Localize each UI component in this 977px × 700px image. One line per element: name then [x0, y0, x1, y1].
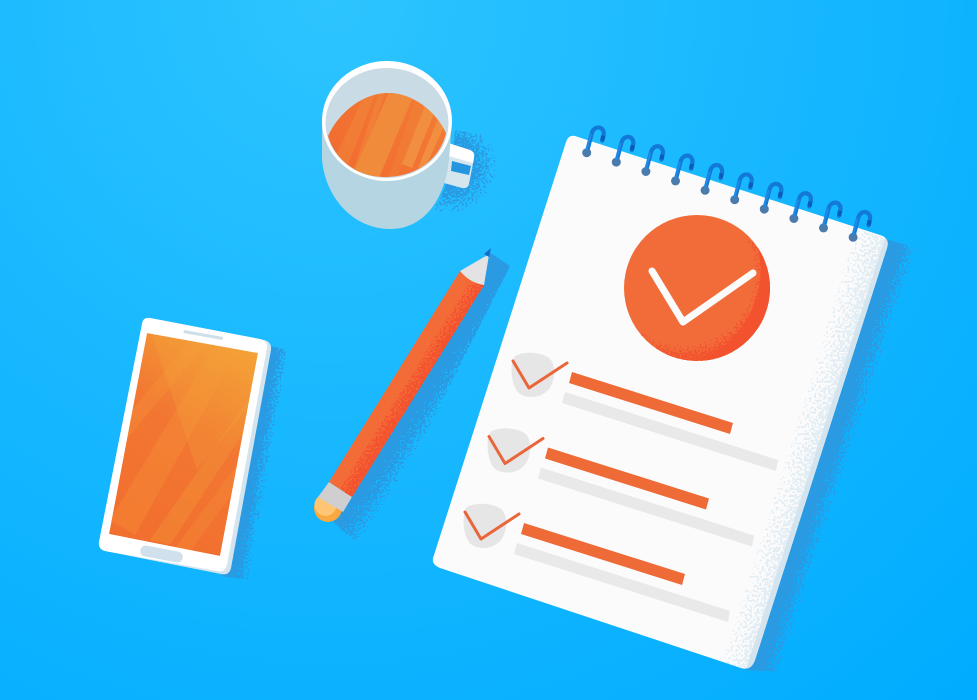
grey line [514, 543, 730, 622]
mug handle [444, 142, 474, 188]
grey line [562, 392, 778, 471]
checklist row 1 [512, 353, 778, 471]
phone speaker [184, 330, 223, 340]
pencil lead [484, 248, 491, 257]
coffee mug [320, 61, 496, 236]
check mark [489, 436, 543, 464]
smartphone [99, 318, 292, 580]
check mark [465, 512, 519, 539]
check mark [513, 361, 567, 388]
pencil shadow [332, 252, 510, 540]
pencil [314, 248, 510, 540]
mug body [322, 121, 452, 229]
spiral binding [582, 127, 870, 242]
checkbox [512, 353, 554, 397]
large check badge [624, 215, 770, 361]
pencil body [329, 271, 484, 497]
pencil ferrule [318, 482, 352, 512]
phone body [99, 318, 267, 571]
checkbox [464, 504, 506, 548]
notepad [433, 127, 916, 675]
notepad sheet [433, 136, 888, 669]
notepad edge stipple [724, 231, 888, 669]
badge shading [641, 230, 770, 361]
checklist row 2 [488, 428, 754, 546]
orange line [521, 523, 685, 585]
coffee surface [328, 93, 446, 177]
orange line [569, 372, 733, 434]
checklist row 3 [464, 504, 730, 622]
grey line [538, 468, 754, 546]
pencil body shading [340, 278, 484, 497]
phone home button [139, 545, 184, 563]
checkbox [488, 428, 530, 472]
badge check mark [652, 271, 753, 322]
notepad shadow [745, 238, 916, 672]
mug rim [322, 61, 452, 181]
pencil tip [460, 255, 489, 285]
mug shadow [385, 130, 496, 236]
phone screen [109, 333, 262, 556]
phone shadow [222, 345, 292, 580]
phone edge [99, 318, 271, 574]
orange line [545, 448, 709, 510]
pencil eraser [314, 494, 342, 522]
mug interior [326, 68, 448, 178]
